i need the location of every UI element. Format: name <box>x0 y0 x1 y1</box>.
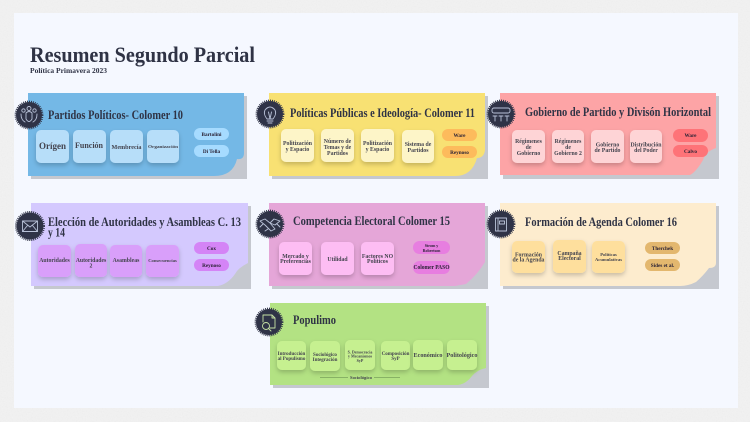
cards: Consecuencias <box>148 258 177 263</box>
author pills <box>645 242 680 271</box>
icon: notebook badge <box>487 210 515 238</box>
heading: Formación de Agenda Colomer 16 <box>525 215 677 229</box>
panel: Gobierno de Partido <box>487 93 719 179</box>
subtitle: Política Primavera 2023 <box>30 66 107 75</box>
cards: Asambleas <box>113 258 140 264</box>
title: Resumen Segundo Parcial <box>30 42 255 67</box>
cards: Preferencias <box>280 259 312 265</box>
cards: y Espacio <box>366 147 389 153</box>
cards: Gobierno <box>517 151 540 157</box>
cards: SyP <box>391 357 400 362</box>
cards: Económico <box>414 352 442 359</box>
cards: Utilidad <box>327 257 348 263</box>
panel: Populimo <box>255 303 489 388</box>
heading second line: y 14 <box>48 226 66 240</box>
panel: Partidos Políticos <box>15 93 247 179</box>
author pills: Di Tella <box>203 149 220 155</box>
cards <box>279 242 394 275</box>
cards: Autoridades <box>39 258 71 264</box>
cards: Acumulativas <box>595 257 622 262</box>
cards: Composición <box>382 352 409 357</box>
author pills: Robertson <box>423 248 441 253</box>
cards: S. Democracia <box>348 350 372 354</box>
cards: y Espacio <box>286 147 309 153</box>
author pills <box>413 241 450 274</box>
cards: Régimenes <box>555 139 581 145</box>
sociológico bracket <box>320 375 400 380</box>
cards: Distribución <box>631 142 661 148</box>
cards: Políticos <box>367 259 389 265</box>
cards: Introducción <box>278 352 305 357</box>
cards: Sistema de <box>405 142 431 148</box>
cards: Politización <box>363 141 392 147</box>
author pills <box>442 129 477 158</box>
cards: Organización <box>148 144 178 149</box>
cards: SyP <box>357 358 364 363</box>
sociológico bracket: Sociológico <box>350 375 373 380</box>
cards: Integración <box>313 358 338 363</box>
cards: de Partido <box>595 148 621 154</box>
cards: de <box>565 145 571 151</box>
cards <box>512 240 625 273</box>
cards: Membrecía <box>112 145 142 151</box>
cards: Orígen <box>39 141 66 151</box>
heading: Gobierno de Partido y Divisón Horizontal <box>525 105 711 119</box>
cards <box>512 130 662 163</box>
icon: seated people badge <box>487 100 515 128</box>
cards: Número de <box>324 139 351 145</box>
author pills: Therchek <box>652 246 673 252</box>
cards <box>277 340 478 371</box>
author pills <box>194 128 229 157</box>
cards: al Populismo <box>278 357 306 362</box>
author pills: Reynoso <box>450 150 469 156</box>
author pills: Calvo <box>684 149 697 155</box>
cards: y Mecanismos <box>348 354 372 359</box>
icon: lightbulb badge <box>256 100 284 128</box>
cards: de <box>526 145 532 151</box>
cards: Politológico <box>446 352 478 359</box>
cards: Partidos <box>408 148 429 154</box>
heading: Elección de Autoridades y Asambleas C. 13 <box>48 215 241 229</box>
heading: Partidos Políticos- Colomer 10 <box>48 108 183 122</box>
icon: envelope badge <box>16 212 44 240</box>
heading: Populimo <box>293 313 336 327</box>
panel: Políticas Públicas e Ideología <box>256 93 488 179</box>
author pills: Reynoso <box>202 263 221 269</box>
cards: Electoral <box>558 256 581 262</box>
icon: people badge <box>15 101 43 129</box>
cards: Autoridades <box>76 258 106 264</box>
author pills: Bartolini <box>202 132 222 138</box>
cards: Gobierno <box>596 142 619 148</box>
author pills <box>194 242 229 271</box>
cards <box>36 130 179 163</box>
cards: Régimenes <box>515 139 542 145</box>
cards: de la Agenda <box>513 258 545 264</box>
author pills: Sides et al. <box>651 263 675 269</box>
cards: Partidos <box>327 151 349 157</box>
author pills: Cox <box>207 246 216 252</box>
cards: Formación <box>515 252 542 258</box>
author pills: Colomer PASO <box>414 265 450 271</box>
cards: del Poder <box>634 148 658 154</box>
cards: 2 <box>90 264 93 270</box>
heading: Competencia Electoral Colomer 15 <box>293 214 450 228</box>
author pills <box>673 129 708 157</box>
cards: Función <box>75 141 104 150</box>
author pills: Ware <box>453 133 466 139</box>
cards: Temas y de <box>324 145 352 151</box>
panel: Formación de Agenda <box>487 203 719 289</box>
cards: Politización <box>283 141 312 147</box>
author pills: Strom y <box>425 243 438 248</box>
cards <box>38 244 179 277</box>
cards: Campaña <box>557 251 582 257</box>
cards: Mercado y <box>282 254 309 260</box>
cards <box>281 129 434 163</box>
cards: Políticas <box>600 252 617 257</box>
panel: Competencia Electoral <box>256 203 488 289</box>
icon: handshake badge <box>256 210 284 238</box>
cards: Factores NO <box>362 254 393 260</box>
icon: document and magnifier badge <box>255 308 283 336</box>
cards: Gobierno 2 <box>554 151 582 157</box>
heading: Políticas Públicas e Ideología- Colomer 11 <box>290 106 475 120</box>
panel: Elección de Autoridades <box>16 203 251 289</box>
author pills: Ware <box>684 133 697 139</box>
cards: Sociológico <box>313 353 337 358</box>
